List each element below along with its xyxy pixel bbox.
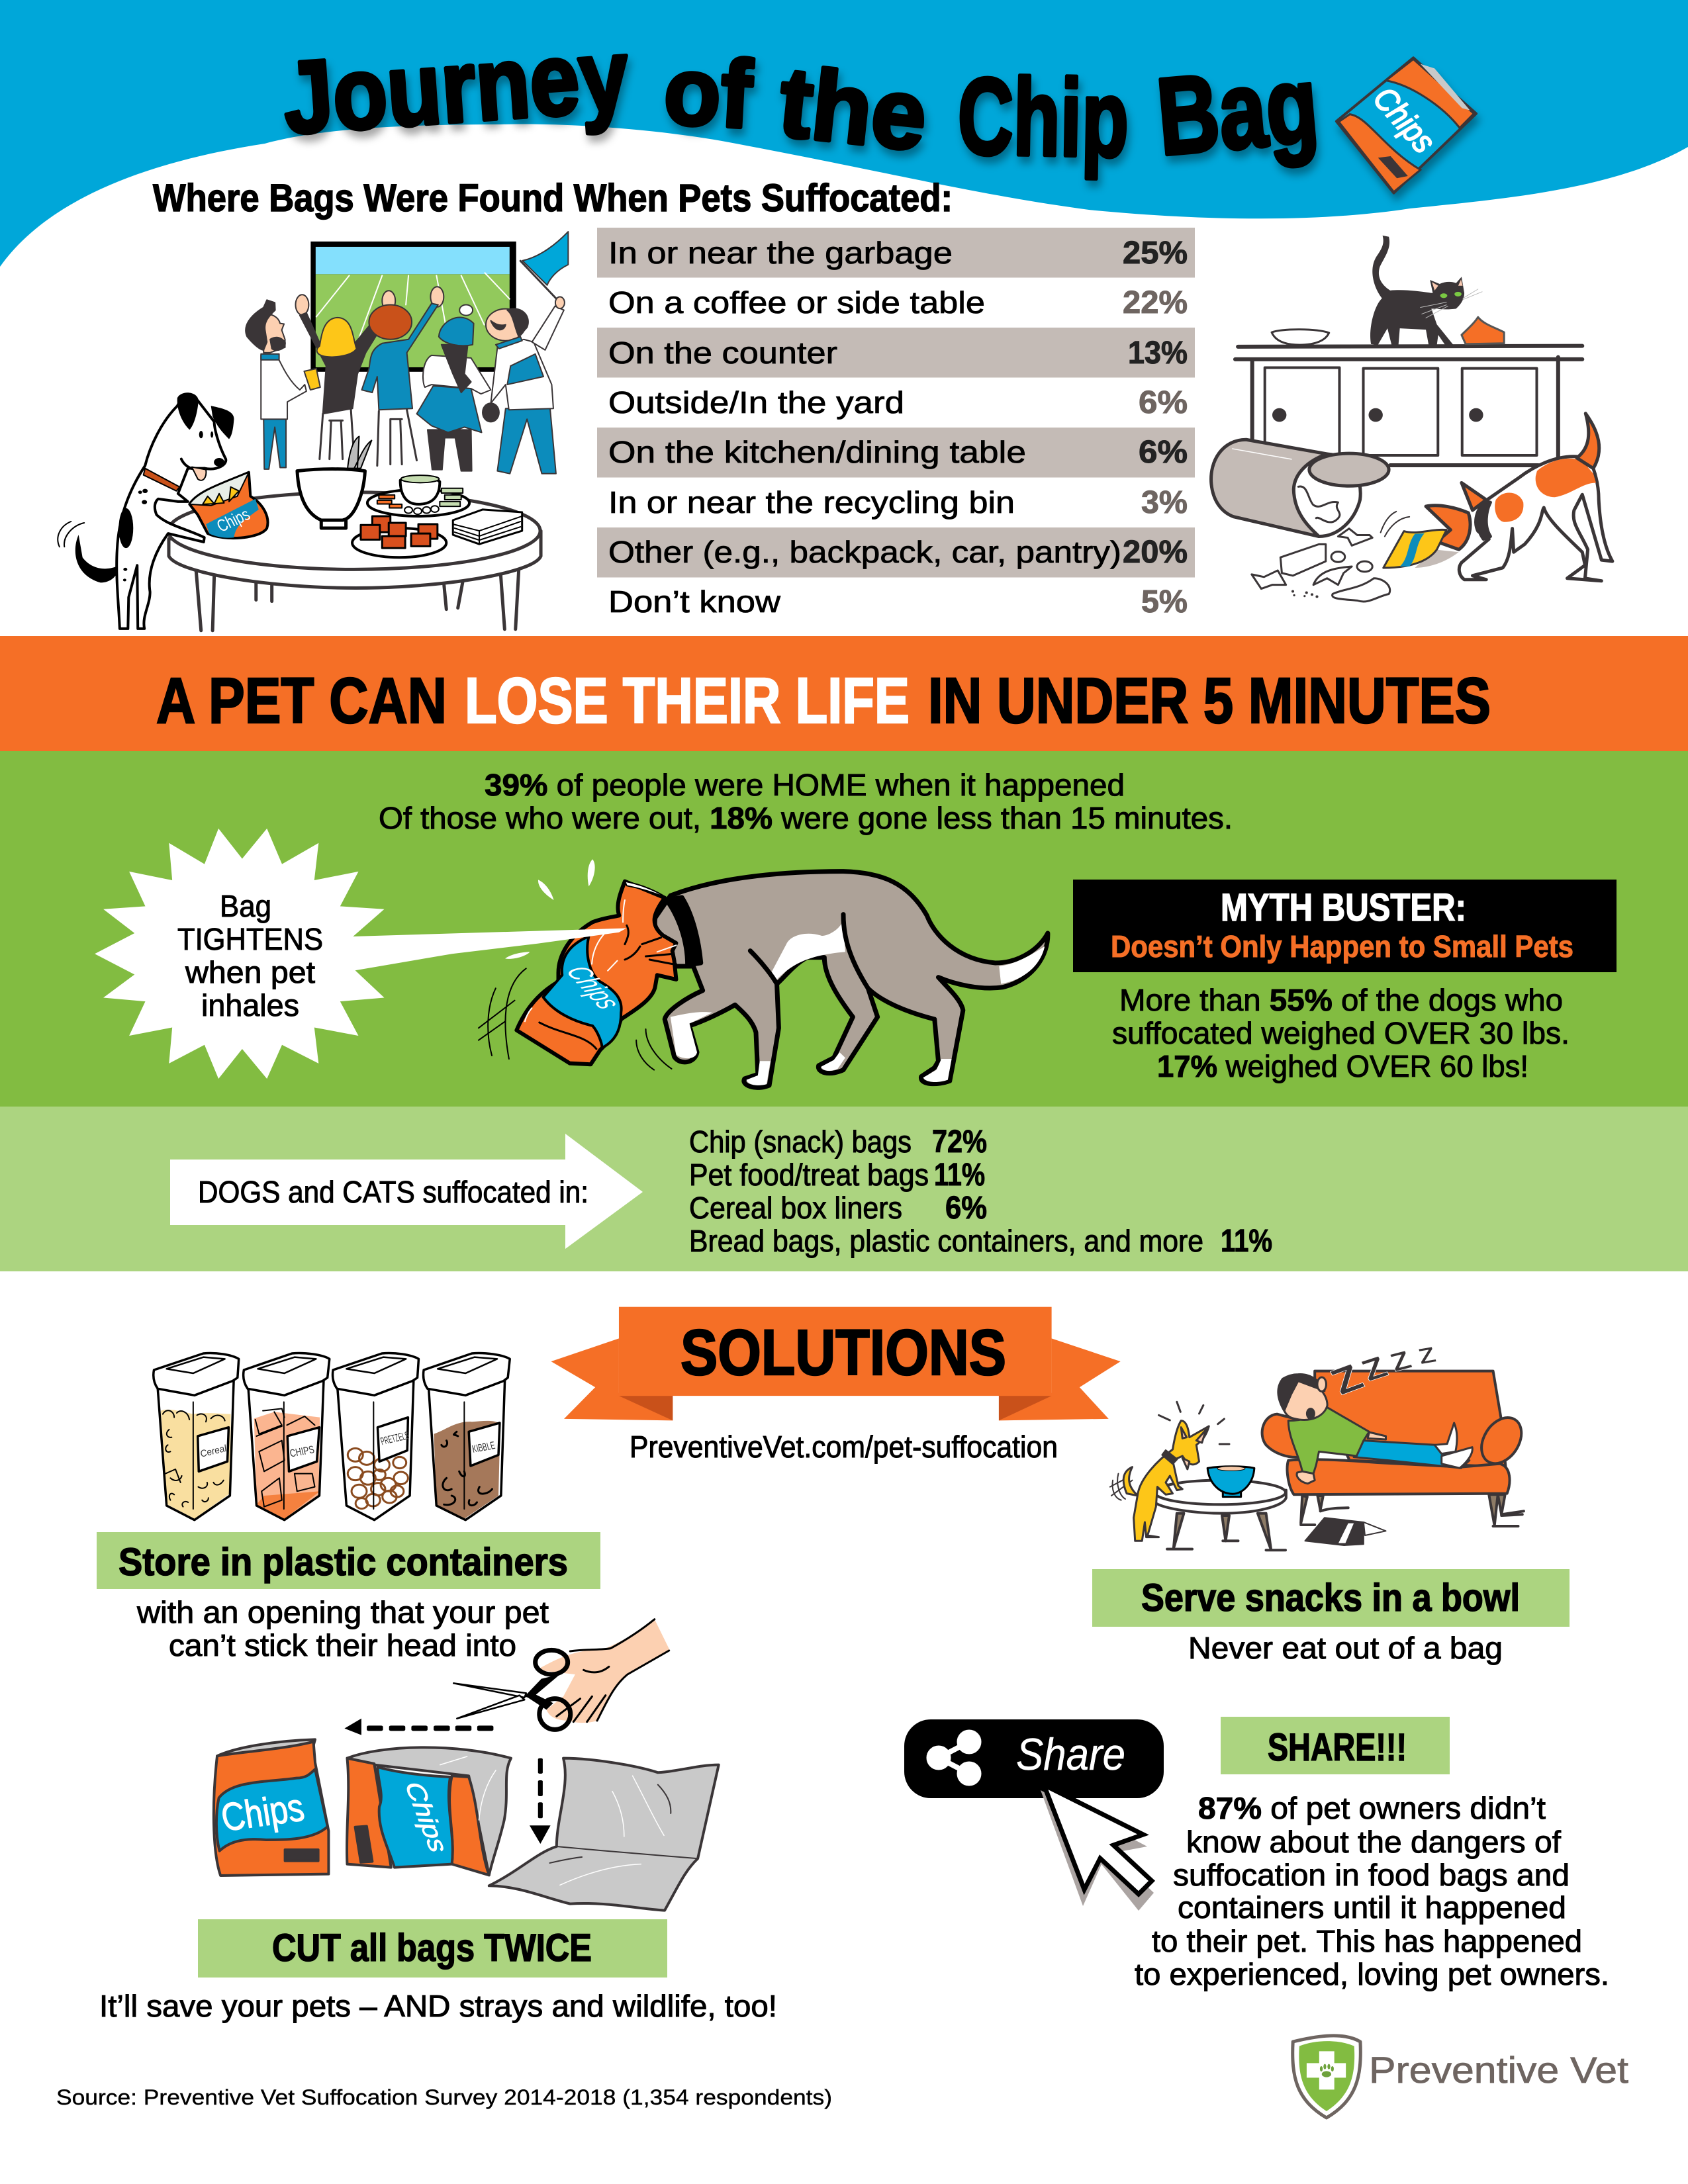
title (279, 17, 1323, 179)
icon: share (927, 1730, 981, 1786)
row 4 (608, 385, 1188, 420)
plate on counter (1272, 330, 1329, 345)
title: Bag (1152, 42, 1323, 178)
whole chips bag: Chips (214, 1786, 310, 1840)
starburst text: TIGHTENS (177, 922, 323, 956)
title: the (774, 46, 932, 171)
cat (1370, 236, 1482, 345)
text: share paragraph: to their pet. This has happened (1152, 1924, 1582, 1958)
text: dog weight (1112, 983, 1570, 1083)
share button with cursor (904, 1719, 1164, 1911)
illustration: storage containers (154, 1353, 510, 1520)
napkins (453, 510, 522, 544)
row 4: 6% (1139, 385, 1188, 420)
flattened bag (489, 1758, 719, 1911)
headline: LOSE THEIR LIFE (465, 664, 910, 737)
container: kibble (424, 1353, 510, 1520)
dog at table (58, 392, 234, 629)
motion lines (479, 968, 672, 1070)
label: cut all bags twice (198, 1919, 667, 1978)
list: what pets suffocated in: Chip (snack) bags (689, 1124, 912, 1159)
myth buster box (1073, 880, 1617, 972)
list: what pets suffocated in (689, 1124, 1272, 1259)
bowl with spoons (297, 436, 371, 528)
dashed arrow down (530, 1758, 551, 1844)
table (168, 492, 541, 631)
text: container advice (136, 1595, 549, 1662)
logo: preventive vet: Preventive Vet (1369, 2049, 1628, 2091)
banner: lose their life (0, 636, 1688, 751)
book on floor (1305, 1518, 1386, 1545)
list: what pets suffocated in: Pet food/treat bags (689, 1158, 929, 1192)
debris (1252, 512, 1409, 602)
row 5 (608, 435, 1188, 470)
share button with cursor: Share (1016, 1729, 1125, 1780)
list: what pets suffocated in: 11% (1221, 1224, 1272, 1259)
row 7: 20% (1123, 535, 1188, 570)
starburst text: when pet (185, 955, 315, 989)
whole chips bag (214, 1739, 328, 1876)
sleeping z letters: Z (1416, 1343, 1438, 1369)
blue bowl (1207, 1467, 1254, 1497)
label: store in plastic containers: Store in plastic containers (118, 1541, 568, 1584)
label: serve snacks in a bowl: Serve snacks in a bowl (1141, 1576, 1520, 1619)
text: share paragraph (1135, 1791, 1609, 1991)
text: container advice: can’t stick their head into (169, 1628, 516, 1662)
sleeping z letters: Z (1323, 1357, 1370, 1402)
illustration: cat, cabinet, garbage can and dog (1211, 236, 1613, 602)
title: Chip (957, 55, 1130, 179)
list: what pets suffocated in: Cereal box liners (689, 1191, 902, 1225)
illustration: person on couch and dog at bowl (1110, 1343, 1528, 1550)
container: cereal (154, 1353, 239, 1520)
text: home statistics (379, 768, 1233, 835)
label: share (1221, 1717, 1450, 1774)
logo: preventive vet (1293, 2036, 1628, 2118)
grey dog (655, 872, 1048, 1087)
starburst text (177, 889, 323, 1023)
couch (1262, 1371, 1528, 1526)
row 3 (608, 336, 1188, 371)
chips bag on dog head: Chips (559, 963, 628, 1013)
hand with scissors (453, 1619, 670, 1729)
text: home statistics: 39% of people were HOME when it happened (485, 768, 1125, 802)
row 8: Don’t know (608, 584, 781, 619)
container: cereal: Cereal (199, 1443, 228, 1459)
row 2: 22% (1123, 285, 1188, 320)
list: what pets suffocated in: 6% (945, 1191, 987, 1226)
dog with bag (1383, 414, 1613, 581)
container: kibble: KIBBLE (471, 1439, 496, 1455)
chip bag on table (189, 473, 267, 538)
title: Journey (279, 17, 632, 156)
row 2 (608, 285, 1188, 320)
row 3: On the counter (608, 336, 837, 370)
myth buster box: Doesn’t Only Happen to Small Pets (1111, 929, 1573, 964)
text: share paragraph: containers until it happened (1178, 1890, 1566, 1925)
row 3: 13% (1128, 336, 1188, 371)
panel: light green section (0, 1107, 1688, 1271)
man with flag (483, 232, 568, 474)
bag cut open (347, 1747, 511, 1875)
headline (156, 664, 1491, 737)
woman with blonde hair (295, 291, 395, 459)
header wave (0, 0, 1688, 267)
man with glass (246, 300, 320, 469)
row 6 (608, 485, 1188, 520)
illustration: cutting chip bags (214, 1619, 719, 1911)
text: share paragraph: suffocation in food bags and (1173, 1858, 1570, 1892)
bag cut open: Chips (399, 1780, 453, 1854)
label: serve snacks in a bowl (1092, 1569, 1570, 1627)
table: where bags were found (597, 228, 1195, 619)
cabinet (1235, 346, 1582, 465)
myth buster box: MYTH BUSTER: (1221, 886, 1466, 929)
sleeping z letters: Z (1356, 1350, 1393, 1387)
url: PreventiveVet.com/pet-suffocation (630, 1430, 1058, 1464)
arrow: dogs and cats (170, 1134, 643, 1249)
text: save your pets: It’ll save your pets – AND strays and wildlife, too! (99, 1989, 777, 2023)
row 6: In or near the recycling bin (608, 485, 1015, 520)
solutions ribbon (551, 1307, 1121, 1420)
illustration: dog with bag on head (479, 859, 1048, 1087)
container: pretzels: PRETZELS (379, 1429, 410, 1447)
row 8 (608, 584, 1188, 619)
icon: chip bag in title (1336, 58, 1476, 193)
row 1 (608, 236, 1188, 271)
woman in beanie (417, 305, 491, 471)
woman with red hair (361, 287, 444, 466)
container: chips: CHIPS (289, 1444, 316, 1460)
sleeping z letters (1323, 1343, 1438, 1402)
row 1: In or near the garbage (608, 236, 953, 270)
text: dog weight: 17% weighed OVER 60 lbs! (1157, 1049, 1528, 1083)
text: share paragraph: know about the dangers of (1186, 1825, 1561, 1859)
text: dog weight: suffocated weighed OVER 30 lbs. (1112, 1016, 1570, 1050)
white motion marks (505, 859, 595, 959)
sleeping z letters: Z (1386, 1345, 1416, 1377)
row 4: Outside/In the yard (608, 385, 904, 420)
plate with snacks (352, 516, 446, 557)
container: pretzels (333, 1353, 418, 1520)
panel: green section (0, 751, 1688, 1107)
television (310, 242, 516, 372)
coffee table (1154, 1480, 1286, 1550)
plate with dip (367, 475, 469, 516)
trash can (1211, 439, 1389, 537)
small orange bag (1462, 317, 1504, 344)
sleeping person (1278, 1375, 1472, 1484)
yellow dog (1110, 1402, 1229, 1541)
dashed arrow left (344, 1719, 493, 1735)
icon: shield (1293, 2036, 1360, 2118)
list: what pets suffocated in: Bread bags, plastic containers, and more (689, 1224, 1203, 1258)
starburst callout (95, 829, 626, 1079)
row 5: On the kitchen/dining table (608, 435, 1026, 469)
starburst text: Bag (220, 889, 271, 923)
headline: A PET CAN (156, 664, 447, 737)
text: share paragraph: 87% of pet owners didn’t (1198, 1791, 1546, 1825)
source: Source: Preventive Vet Suffocation Survey 2014-2018 (1,354 respondents) (56, 2085, 832, 2109)
row 7: Other (e.g., backpack, car, pantry) (608, 535, 1121, 569)
list: what pets suffocated in: 72% (932, 1124, 987, 1160)
heading: where bags were found: Where Bags Were Found When Pets Suffocated: (153, 177, 953, 220)
text: dog weight: More than 55% of the dogs who (1119, 983, 1563, 1017)
chip bag on table: Chips (212, 505, 254, 535)
row 1: 25% (1123, 236, 1188, 271)
text: share paragraph: to experienced, loving pet owners. (1135, 1957, 1609, 1991)
row 2: On a coffee or side table (608, 285, 985, 320)
chips bag on dog head (516, 882, 676, 1064)
headline: IN UNDER 5 MINUTES (928, 664, 1491, 737)
starburst text: inhales (201, 988, 299, 1023)
solutions ribbon: SOLUTIONS (680, 1316, 1006, 1388)
list: what pets suffocated in: 11% (934, 1158, 985, 1193)
illustration: party with dog at table (58, 232, 568, 631)
row 6: 3% (1141, 485, 1188, 520)
text: container advice: with an opening that your pet (136, 1595, 549, 1629)
row 5: 6% (1139, 435, 1188, 470)
container: chips (244, 1353, 330, 1520)
text: never eat out of a bag: Never eat out of a bag (1188, 1631, 1503, 1665)
icon: cursor (1041, 1785, 1154, 1911)
icon: chip bag in title: Chips (1366, 79, 1442, 160)
arrow: dogs and cats: DOGS and CATS suffocated in: (198, 1175, 588, 1209)
title: of (661, 36, 755, 148)
label: share: SHARE!!! (1268, 1726, 1407, 1769)
row 8: 5% (1141, 584, 1188, 619)
label: cut all bags twice: CUT all bags TWICE (272, 1927, 592, 1970)
text: home statistics: Of those who were out, 18% were gone less than 15 minutes. (379, 801, 1233, 835)
